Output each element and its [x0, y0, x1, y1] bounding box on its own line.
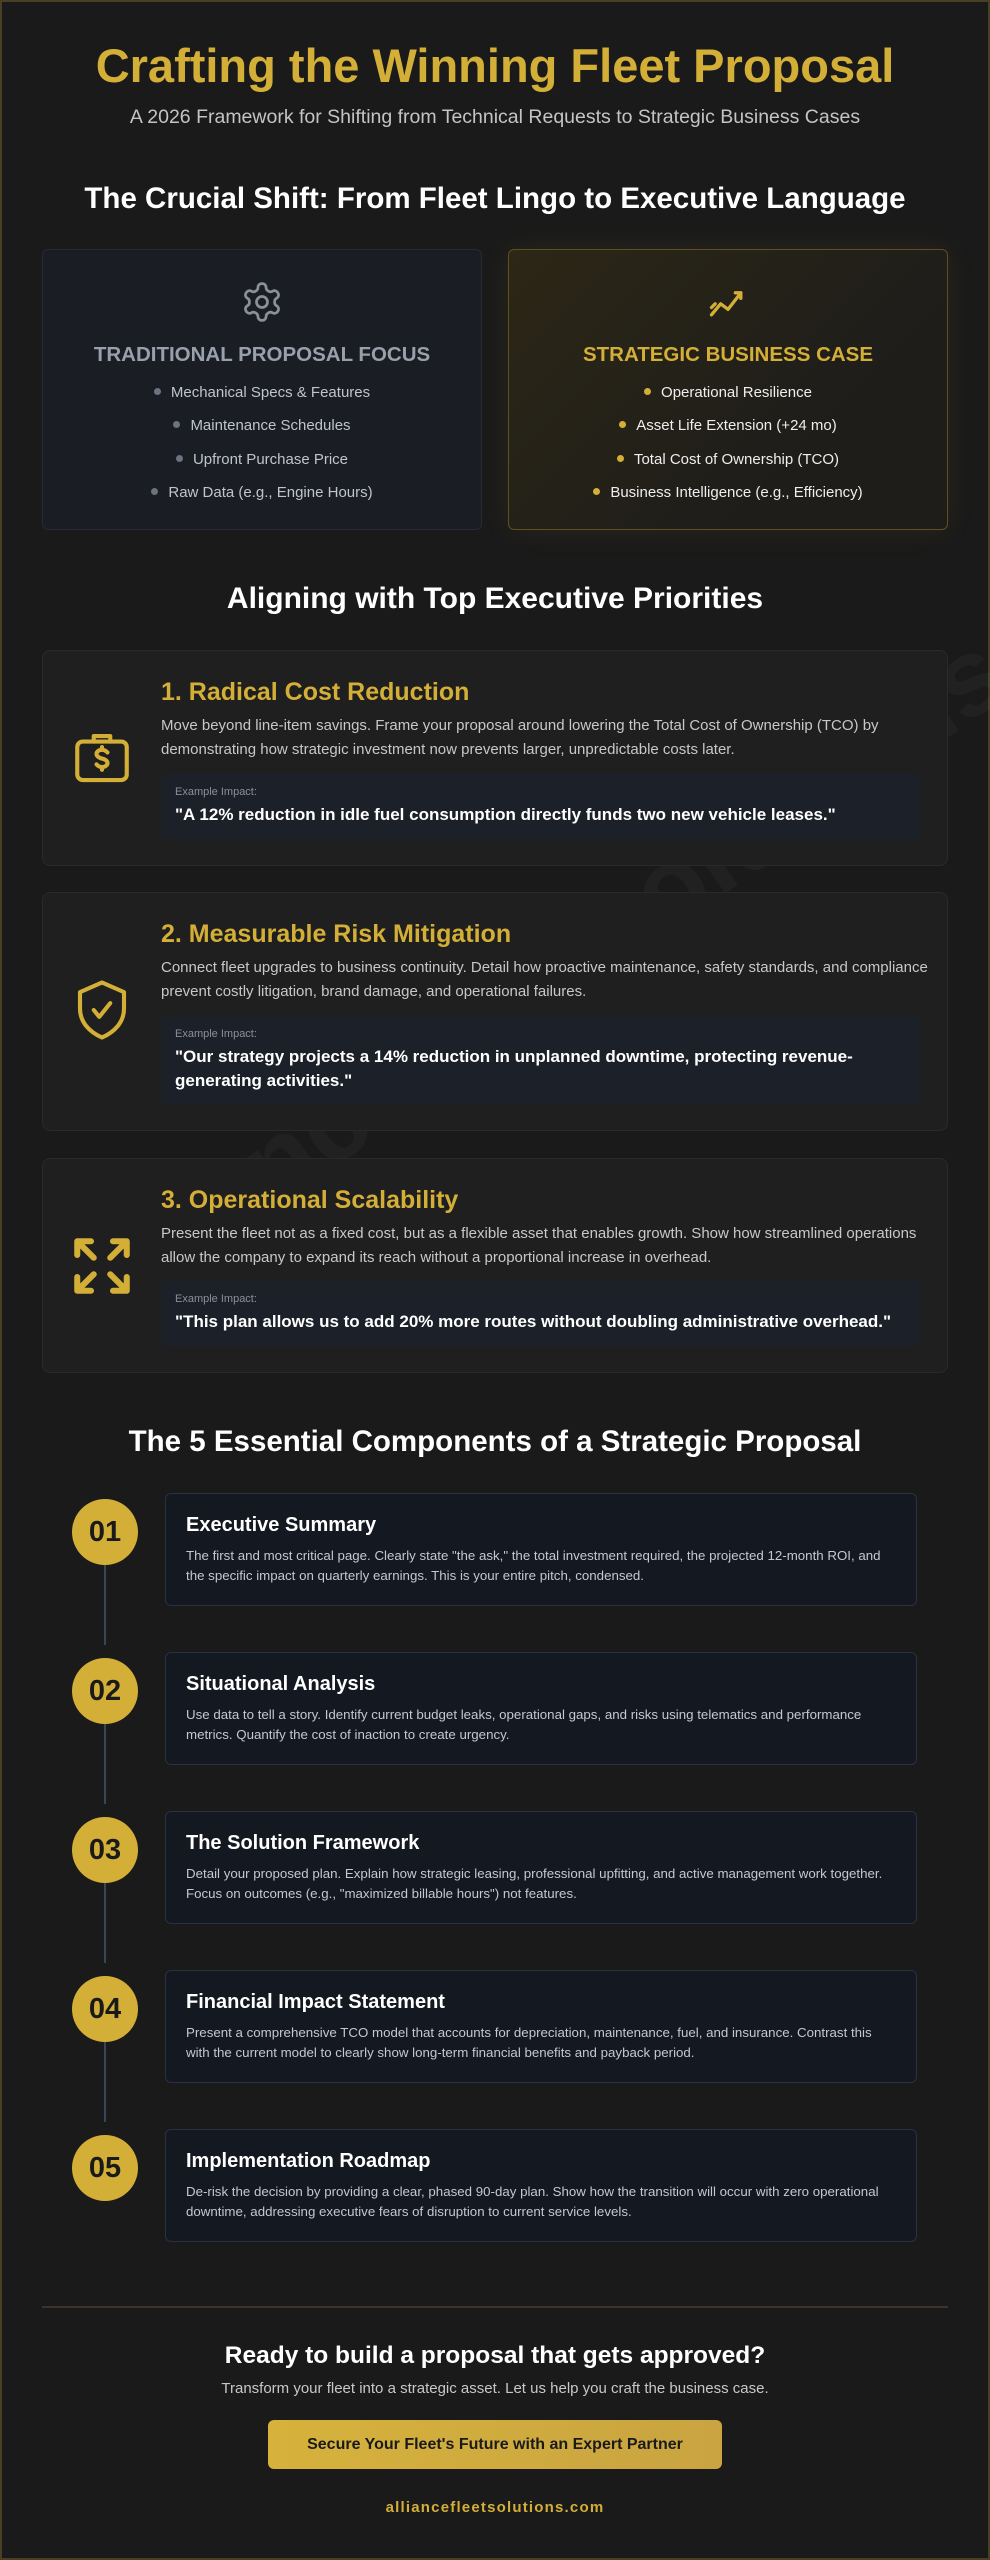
card: Implementation Roadmap — [186, 2150, 430, 2172]
callout: "Our strategy projects a 14% reduction in unplanned downtime, protecting revenue-generating activities." — [175, 1047, 853, 1090]
badge: 03 — [89, 1834, 121, 1866]
step 1 — [72, 1493, 917, 1606]
CTA text: Transform your fleet into a strategic asset. Let us help you craft the business case. — [221, 2380, 769, 2397]
list: Total Cost of Ownership (TCO) — [634, 451, 839, 468]
button — [268, 2420, 722, 2469]
badge — [72, 1817, 138, 1883]
heading: STRATEGIC BUSINESS CASE — [583, 343, 873, 366]
step 2 — [72, 1652, 917, 1765]
card — [165, 2129, 917, 2242]
list: Operational Resilience — [661, 384, 812, 401]
card: Situational Analysis — [186, 1673, 375, 1695]
heading: 3. Operational Scalability — [161, 1186, 458, 1214]
card: The first and most critical page. Clearly state "the ask," the total investment required, the projected 12-month ROI, and the specific impact on quarterly earnings. This is your entire pitch, condensed. — [186, 1548, 881, 1583]
card: Executive Summary — [186, 1514, 376, 1536]
card — [165, 1970, 917, 2083]
badge — [72, 2135, 138, 2201]
list: Maintenance Schedules — [190, 417, 351, 434]
icon: gear — [244, 282, 280, 322]
heading: crucial shift: The Crucial Shift: From Fleet Lingo to Executive Language — [84, 182, 906, 215]
subtitle: A 2026 Framework for Shifting from Technical Requests to Strategic Business Cases — [130, 106, 860, 128]
list — [593, 384, 863, 501]
badge — [72, 1499, 138, 1565]
list: Asset Life Extension (+24 mo) — [636, 417, 837, 434]
badge: 02 — [89, 1675, 121, 1707]
step 5 — [72, 2129, 917, 2242]
badge: 04 — [89, 1993, 121, 2025]
timeline lines — [104, 1565, 106, 1645]
callout — [161, 1016, 921, 1104]
list: Mechanical Specs & Features — [171, 384, 370, 401]
step 4 — [72, 1970, 917, 2083]
heading: priorities: Aligning with Top Executive Priorities — [227, 582, 763, 615]
panel: priority 2 — [42, 892, 948, 1131]
badge: 05 — [89, 2152, 121, 2184]
card: Present a comprehensive TCO model that accounts for depreciation, maintenance, fuel, and insurance. Contrast this with the current model to clearly show long-term financial benefits and payback period. — [186, 2025, 872, 2060]
panel: strategic — [508, 249, 948, 530]
card — [165, 1811, 917, 1924]
icon: money bag — [75, 734, 129, 782]
heading: 1. Radical Cost Reduction — [161, 678, 469, 706]
text: Present the fleet not as a fixed cost, but as a flexible asset that enables growth. Show how streamlined operations allow the company to expand its reach without a proportional increase in overhead. — [161, 1225, 916, 1266]
callout — [161, 774, 921, 839]
card: Use data to tell a story. Identify current budget leaks, operational gaps, and risks using telematics and performance metrics. Quantify the cost of inaction to create urgency. — [186, 1707, 861, 1742]
button: Secure Your Fleet's Future with an Expert Partner — [307, 2436, 683, 2453]
card: De-risk the decision by providing a clear, phased 90-day plan. Show how the transition will occur with zero operational downtime, addressing executive fears of disruption to current service levels. — [186, 2184, 879, 2219]
card: Financial Impact Statement — [186, 1991, 445, 2013]
list: Business Intelligence (e.g., Efficiency) — [610, 484, 863, 501]
callout: Example Impact: — [175, 1028, 257, 1040]
card — [165, 1493, 917, 1606]
list: Upfront Purchase Price — [193, 451, 348, 468]
text: Move beyond line-item savings. Frame your proposal around lowering the Total Cost of Ownership (TCO) by demonstrating how strategic investment now prevents larger, unpredictable costs later. — [161, 717, 879, 758]
card: Detail your proposed plan. Explain how strategic leasing, professional upfitting, and active management work together. Focus on outcomes (e.g., "maximized billable hours") not features. — [186, 1866, 882, 1901]
list — [151, 384, 373, 501]
card: The Solution Framework — [186, 1832, 419, 1854]
title: Crafting the Winning Fleet Proposal — [96, 39, 894, 92]
card — [165, 1652, 917, 1765]
callout: Example Impact: — [175, 1293, 257, 1305]
callout: Example Impact: — [175, 786, 257, 798]
list: Raw Data (e.g., Engine Hours) — [168, 484, 373, 501]
heading: TRADITIONAL PROPOSAL FOCUS — [94, 343, 430, 366]
badge — [72, 1976, 138, 2042]
CTA heading: Ready to build a proposal that gets approved? — [225, 2342, 765, 2369]
icon: trend — [710, 291, 743, 317]
footer url: alliancefleetsolutions.com — [386, 2499, 604, 2516]
icon: expand arrows — [74, 1238, 130, 1294]
panel: priority 1 — [42, 650, 948, 866]
badge — [72, 1658, 138, 1724]
icon: shield — [78, 980, 126, 1040]
heading: 2. Measurable Risk Mitigation — [161, 920, 511, 948]
panel: traditional — [42, 249, 482, 530]
callout: "This plan allows us to add 20% more routes without doubling administrative overhead." — [175, 1312, 891, 1331]
callout — [161, 1281, 921, 1346]
text: Connect fleet upgrades to business continuity. Detail how proactive maintenance, safety standards, and compliance prevent costly litigation, brand damage, and operational failures. — [161, 959, 928, 1000]
step 3 — [72, 1811, 917, 1924]
badge: 01 — [89, 1516, 121, 1548]
panel: priority 3 — [42, 1158, 948, 1373]
heading: components: The 5 Essential Components of a Strategic Proposal — [129, 1425, 861, 1458]
callout: "A 12% reduction in idle fuel consumption directly funds two new vehicle leases." — [175, 805, 836, 824]
